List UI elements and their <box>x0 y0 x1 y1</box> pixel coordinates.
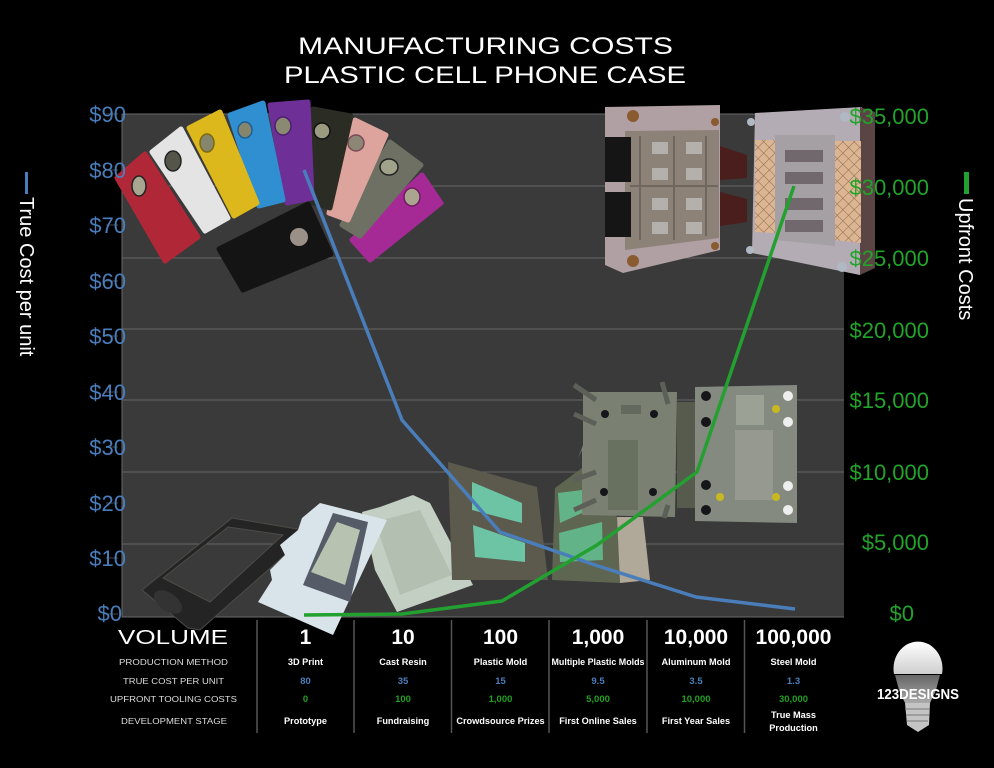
title <box>284 33 686 89</box>
row: true cost per unit: TRUE COST PER UNIT <box>123 677 224 686</box>
logo: 123designs light bulb <box>877 642 959 732</box>
left axis labels <box>89 102 126 626</box>
row: volume: VOLUME <box>118 627 228 649</box>
row: development stage: Crowdsource Prizes <box>456 716 545 726</box>
right axis labels: $10,000 <box>849 460 929 485</box>
right axis labels: $5,000 <box>862 530 929 555</box>
left axis labels: $0 <box>98 601 122 626</box>
row: production method: PRODUCTION METHOD <box>119 658 228 667</box>
row: development stage: True Mass <box>771 710 816 720</box>
image: aluminum mold <box>574 382 797 523</box>
row: upfront tooling costs <box>110 694 808 705</box>
row: production method: 3D Print <box>288 657 323 667</box>
row: development stage: DEVELOPMENT STAGE <box>121 717 227 726</box>
row: development stage: Production <box>769 723 818 733</box>
row: production method <box>119 657 816 667</box>
row: upfront tooling costs: 5,000 <box>586 694 610 705</box>
row: upfront tooling costs: 0 <box>303 694 308 705</box>
row: development stage: Fundraising <box>377 716 429 726</box>
row: volume: 1,000 <box>572 626 624 649</box>
line: upfront costs <box>304 186 794 615</box>
right axis labels: $30,000 <box>849 175 929 200</box>
legend: upfront costs: Upfront Costs <box>954 198 976 320</box>
image: plastic molds <box>448 462 650 583</box>
row: development stage: First Year Sales <box>662 716 730 726</box>
title: MANUFACTURING COSTS <box>298 33 673 60</box>
image: cast resin molds <box>258 495 473 635</box>
row: upfront tooling costs: UPFRONT TOOLING COSTS <box>110 695 237 704</box>
image: colored phone cases <box>117 102 441 290</box>
right axis labels: $35,000 <box>849 104 929 129</box>
row: development stage <box>121 710 818 733</box>
left axis labels: $80 <box>89 158 126 183</box>
row: production method: Plastic Mold <box>474 657 527 667</box>
row: upfront tooling costs: 30,000 <box>779 694 808 705</box>
row: development stage: First Online Sales <box>559 716 637 726</box>
row: production method: Aluminum Mold <box>662 657 730 667</box>
logo: 123designs light bulb: 123DESIGNS <box>877 686 959 703</box>
row: volume: 10 <box>391 626 415 649</box>
left axis labels: $90 <box>89 102 126 127</box>
row: true cost per unit: 15 <box>495 676 506 687</box>
image: 3D printed frame <box>142 518 303 630</box>
row: true cost per unit: 80 <box>300 676 311 687</box>
row: volume: 10,000 <box>664 626 728 649</box>
right axis labels: $0 <box>890 601 914 626</box>
row: volume <box>118 626 831 649</box>
row: upfront tooling costs: 1,000 <box>489 694 512 705</box>
left axis labels: $10 <box>89 546 126 571</box>
image: steel mold halves <box>605 105 875 275</box>
left axis labels: $20 <box>89 491 126 516</box>
row: production method: Steel Mold <box>771 657 816 667</box>
row: volume: 100,000 <box>756 626 831 649</box>
row: true cost per unit: 1.3 <box>787 676 800 687</box>
left axis labels: $30 <box>89 435 126 460</box>
line: true cost per unit <box>304 170 795 609</box>
title: PLASTIC CELL PHONE CASE <box>284 62 686 89</box>
row: true cost per unit: 3.5 <box>689 676 703 687</box>
right axis labels: $20,000 <box>849 318 929 343</box>
row: upfront tooling costs: 100 <box>395 694 411 705</box>
left axis labels: $60 <box>89 269 126 294</box>
chart plot area <box>106 114 844 617</box>
data table <box>110 620 831 733</box>
right axis labels: $25,000 <box>849 246 929 271</box>
right axis labels <box>849 104 929 626</box>
row: true cost per unit: 35 <box>398 676 409 687</box>
row: production method: Cast Resin <box>379 657 427 667</box>
row: true cost per unit <box>123 676 800 687</box>
row: production method: Multiple Plastic Molds <box>552 657 644 667</box>
left axis labels: $40 <box>89 380 126 405</box>
row: volume: 1 <box>300 626 312 649</box>
row: development stage: Prototype <box>284 716 327 726</box>
row: upfront tooling costs: 10,000 <box>681 694 711 705</box>
right axis labels: $15,000 <box>849 388 929 413</box>
left axis labels: $50 <box>89 324 126 349</box>
legend: true cost per unit: True Cost per unit <box>15 197 37 357</box>
row: true cost per unit: 9.5 <box>591 676 605 687</box>
row: volume: 100 <box>483 626 518 649</box>
left axis labels: $70 <box>89 213 126 238</box>
